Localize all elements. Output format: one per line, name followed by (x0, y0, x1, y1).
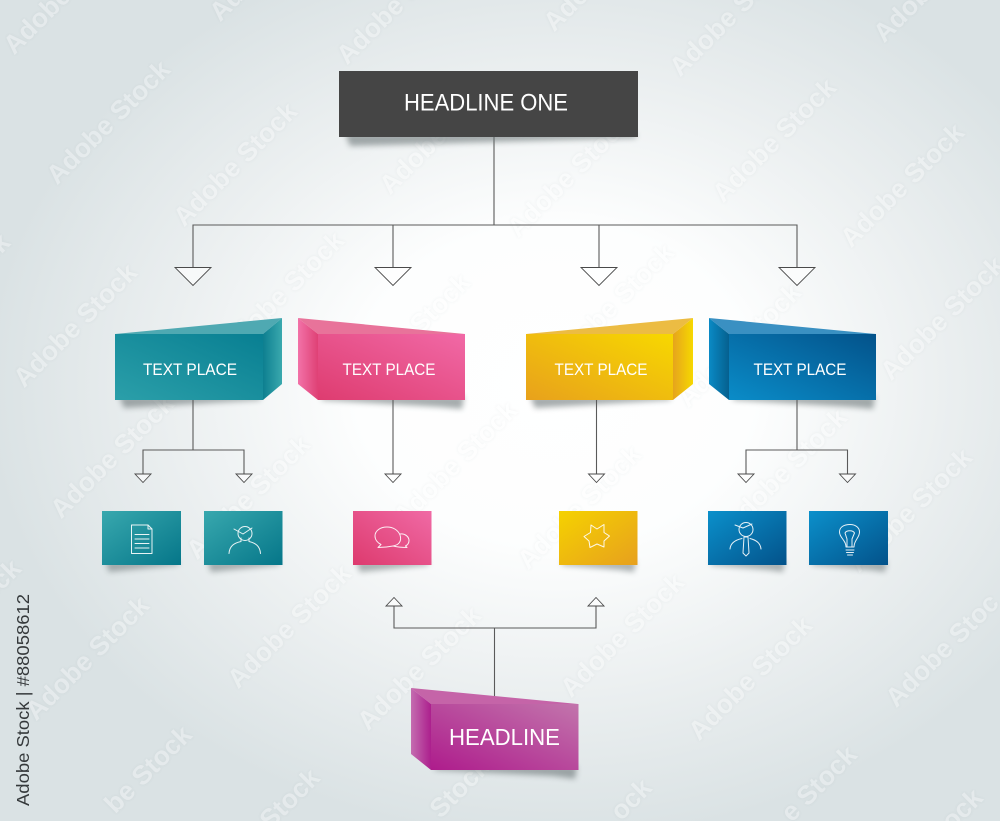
watermark pattern: Adobe Stock (501, 107, 637, 243)
headline one box (339, 71, 638, 146)
watermark pattern: Adobe Stock (214, 225, 350, 361)
icon: businessman with tie (730, 522, 761, 556)
blue box text: TEXT PLACE (754, 360, 846, 379)
watermark pattern: Adobe Stock (180, 429, 316, 565)
yellow box text: TEXT PLACE (554, 360, 648, 379)
panel: blue box (709, 318, 876, 409)
watermark pattern: Adobe Stock (373, 64, 509, 200)
watermark pattern: Adobe Stock (19, 590, 155, 726)
teal connector (135, 400, 252, 482)
watermark pattern: Adobe Stock (834, 117, 970, 253)
pink connector (385, 400, 401, 482)
watermark pattern: be Stock (98, 719, 198, 819)
headline one text: HEADLINE ONE (404, 90, 568, 116)
watermark pattern: Adobe Stock (682, 610, 818, 746)
watermark pattern: Adobe Stock (842, 442, 978, 578)
panel: star icon box (559, 511, 638, 565)
panel: document icon box (102, 511, 181, 565)
teal box text: TEXT PLACE (143, 360, 237, 379)
pink box text: TEXT PLACE (342, 360, 436, 379)
icon: person with cap (229, 526, 260, 554)
watermark pattern: Adobe Stock (671, 277, 807, 413)
panel: businessman icon box (708, 511, 786, 565)
watermark pattern: Adobe Stock (706, 72, 842, 208)
icon: light bulb (840, 524, 860, 555)
bottom connector with two up arrows (386, 598, 604, 696)
yellow connector (588, 400, 604, 482)
headline text: HEADLINE (449, 724, 560, 750)
watermark pattern: Adobe Stock (387, 395, 523, 531)
top connector with four arrows (175, 137, 815, 286)
watermark pattern: Adobe Stock (221, 558, 357, 694)
watermark pattern: Adobe Stock (554, 567, 690, 703)
watermark pattern: Adobe Stock (717, 402, 853, 538)
watermark pattern: Adobe Stock (44, 388, 180, 524)
panel: magenta headline box (411, 688, 578, 779)
panel: pink box (298, 318, 465, 409)
blue connector (738, 400, 856, 482)
icon: speech bubbles (375, 527, 409, 548)
small shadows (105, 561, 887, 572)
panel: speech bubbles icon box (353, 511, 432, 565)
watermark pattern: Adobe Stock (7, 257, 143, 393)
watermark pattern: Adobe Stock (40, 54, 176, 190)
icon: document (132, 525, 152, 554)
panel: yellow box (526, 318, 693, 408)
watermark pattern: Adobe Stock (511, 439, 647, 575)
watermark pattern: Adobe Stock (351, 600, 487, 736)
icon: six-point star (584, 524, 610, 548)
image credit: Adobe Stock | #88058612 (13, 594, 33, 806)
watermark pattern: Adobe Stock (167, 96, 303, 232)
watermark pattern: Adobe Stock (544, 237, 680, 373)
panel: light bulb icon box (809, 511, 888, 565)
panel: person icon box (204, 511, 282, 565)
panel: teal box (115, 318, 282, 408)
watermark pattern: Adobe Stock (340, 267, 476, 403)
